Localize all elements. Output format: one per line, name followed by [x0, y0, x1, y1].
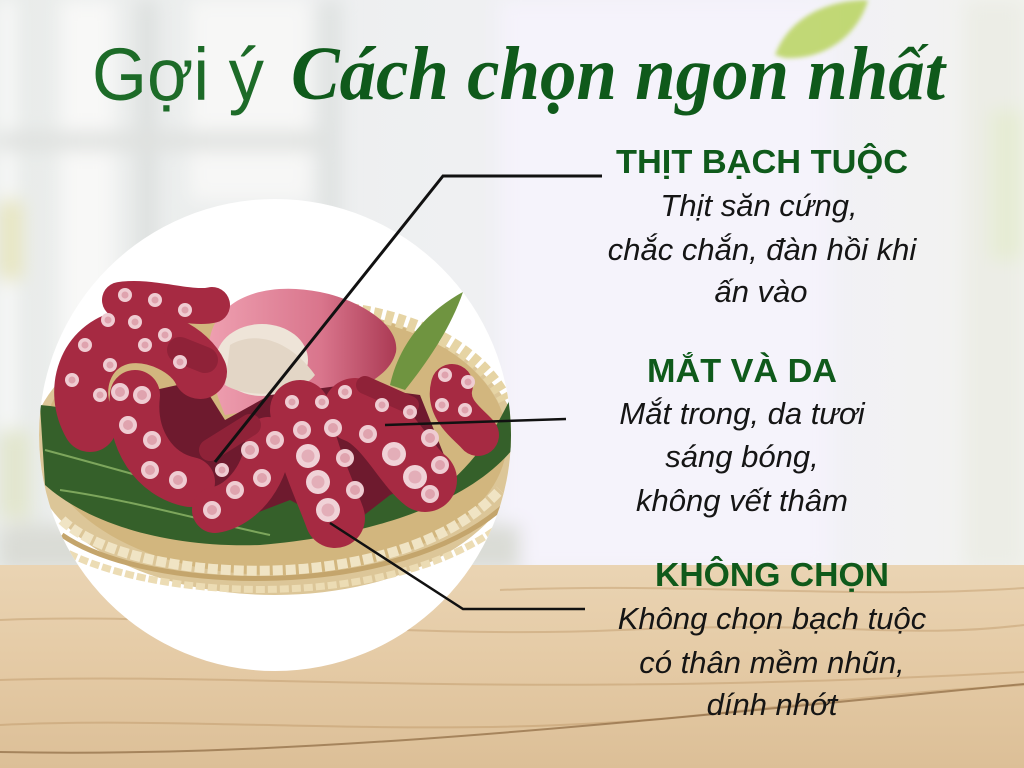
- text block: mắt và da: Mắt trong, da tươi: [619, 396, 866, 431]
- pointer: không chọn: [330, 523, 585, 609]
- white circle: [39, 199, 511, 671]
- background: blurred window: [0, 0, 1024, 570]
- wooden table: [0, 565, 1024, 768]
- suckers: [65, 288, 475, 522]
- text block: thịt bạch tuộc: THỊT BẠCH TUỘC: [616, 142, 908, 180]
- title: Gợi ý: [92, 33, 264, 116]
- text block: mắt và da: MẮT VÀ DA: [647, 352, 837, 389]
- text block: thịt bạch tuộc: ấn vào: [714, 274, 808, 309]
- pointer: mắt và da: [385, 419, 566, 425]
- text block: thịt bạch tuộc: Thịt săn cứng,: [660, 188, 858, 223]
- mantle: [209, 289, 396, 415]
- title: Cách chọn ngon nhất: [291, 32, 948, 116]
- pointer: thịt bạch tuộc: [215, 176, 602, 462]
- text block: không chọn: Không chọn bạch tuộc: [618, 601, 927, 636]
- text block: thịt bạch tuộc: chắc chắn, đàn hồi khi: [608, 232, 917, 267]
- underlayer shadow between tentacles: [110, 380, 450, 530]
- tentacles: [81, 299, 478, 518]
- basket: [30, 292, 520, 595]
- text block: không chọn: KHÔNG CHỌN: [655, 555, 889, 593]
- text block: mắt và da: sáng bóng,: [665, 439, 819, 474]
- text block: thịt bạch tuộc: [608, 142, 917, 309]
- circular photo: octopus on basket: [30, 199, 520, 671]
- text block: không chọn: [618, 555, 927, 722]
- text block: không chọn: có thân mềm nhũn,: [639, 645, 905, 680]
- text block: mắt và da: không vết thâm: [636, 483, 848, 518]
- text block: mắt và da: [619, 352, 866, 518]
- text block: không chọn: dính nhớt: [707, 687, 839, 722]
- background leaf: [775, 0, 868, 58]
- banana leaves: [40, 395, 512, 545]
